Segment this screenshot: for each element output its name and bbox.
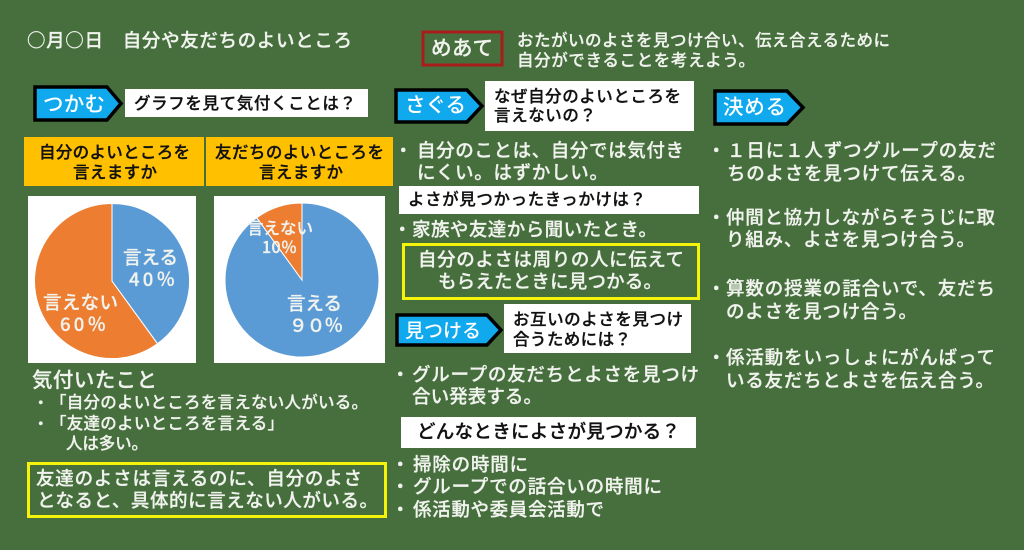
heading: 気付いたこと: 気付いたこと (32, 363, 157, 393)
finding text: 合い発表する。 (412, 383, 542, 409)
notes list: 「友達のよいところを言える」 (50, 410, 284, 434)
notes list: 人は多い。 (66, 430, 148, 454)
decision 4 (707, 344, 995, 393)
pie chart: self 40/60: 言える (123, 244, 178, 270)
decision 3 (707, 275, 995, 324)
goal text (517, 27, 890, 71)
question: グラフを見て気付くことは？: グラフを見て気付くことは？ (134, 90, 356, 114)
arrow label: 見つける (397, 315, 501, 345)
finding text: ・ (391, 361, 410, 387)
callout: summary: 友達のよさは言えるのに、自分のよさ (36, 465, 362, 491)
pie chart: self 40/60: 言えない (43, 289, 118, 315)
decision 1: ちのよさを見つけて伝える。 (727, 160, 976, 186)
arrow label: さぐる: さぐる (405, 88, 466, 118)
pie chart: friends 90/10: 10％ (262, 234, 297, 258)
chart heading: self: 言えますか (73, 159, 158, 183)
goal text: 自分ができることを考えよう。 (517, 47, 755, 71)
question: お互い (504, 304, 691, 353)
decision 3: ・ (707, 275, 726, 301)
chart heading: friends (206, 137, 393, 186)
callout: summary (28, 464, 386, 516)
chart heading: self (24, 137, 204, 186)
question: どんなとき: どんなときによさが見つかる？ (417, 418, 680, 444)
reasons text: 自分のことは、自分では気付き (417, 137, 684, 163)
decision 4: 係活動をいっしょにがんばって (726, 344, 995, 370)
panel: 見つける (391, 304, 699, 522)
question: なぜ: なぜ自分のよいところを (494, 83, 681, 107)
pie chart: friends 90/10 (214, 196, 385, 363)
pie chart: self 40/60 (28, 196, 196, 363)
notes list (33, 389, 368, 454)
answer: 家族や友達: ・ (393, 216, 412, 242)
arrow label: つかむ (35, 87, 121, 120)
pie chart: self 40/60: 60％ (60, 311, 106, 337)
answer: 家族や友達: 家族や友達から聞いたとき。 (412, 216, 657, 242)
decision 2 (707, 204, 995, 252)
panel: さぐる (393, 81, 699, 298)
notes list: 「自分のよいところを言えない人がいる。 (50, 389, 368, 413)
decision 1: １日に１人ずつグループの友だ (727, 137, 996, 163)
decision 2: 仲間と協力しながらそうじに取 (726, 204, 995, 230)
goal label: めあて: めあて (431, 31, 493, 61)
finding text: グループの友だちとよさを見つけ (412, 361, 699, 387)
chart heading: friends: 友だちのよいところを (215, 139, 384, 163)
arrow label: 決める: 決める (723, 90, 786, 120)
goal text: おたがいのよさを見つけ合い、伝え合えるために (517, 27, 890, 51)
panel: 決める (707, 90, 996, 393)
goal label: めあて (423, 31, 502, 65)
question: きっかけ: よさが見つかったきっかけは？ (408, 186, 646, 210)
chart heading: friends: 言えますか (259, 159, 344, 183)
decision 3: のよさを見つけ合う。 (726, 298, 917, 324)
list of occasions: 掃除の時間に (413, 451, 528, 477)
callout: 周りの人: 自分のよさは周りの人に伝えて (418, 246, 684, 272)
decision 1 (707, 137, 996, 186)
notes list: ・ (33, 391, 49, 413)
decision 4: いる友だちとよさを伝え合う。 (726, 367, 994, 393)
question: なぜ (485, 81, 694, 131)
decision 3: 算数の授業の話合いで、友だち (726, 275, 995, 301)
reasons text (394, 137, 684, 185)
decision 4: ・ (707, 344, 726, 370)
question: お互い: 合うためには？ (513, 326, 631, 350)
list of occasions: ・ (391, 451, 410, 477)
reasons text: ・ (394, 137, 413, 163)
arrow label: つかむ: つかむ (43, 87, 105, 117)
list of occasions: ・ (391, 496, 410, 522)
question: きっかけ (399, 186, 699, 214)
arrow label: 決める (715, 90, 803, 124)
panel: つかむ (24, 87, 393, 516)
list of occasions (391, 451, 662, 522)
notes list: ・ (33, 412, 49, 434)
callout: 周りの人: もらえたときに見つかる。 (438, 268, 662, 294)
decision 1: ・ (707, 137, 726, 163)
pie chart: friends 90/10: 言えない (247, 215, 313, 239)
title: ○月○日 自分や友だちのよいところ (27, 27, 352, 53)
list of occasions: ・ (391, 473, 410, 499)
question: なぜ: 言えないの？ (494, 102, 596, 126)
pie chart: friends 90/10: 言える (287, 290, 342, 316)
decision 2: り組み、よさを見つけ合う。 (726, 226, 975, 252)
reasons text: にくい。はずかしい。 (417, 159, 608, 185)
finding text (391, 361, 699, 409)
chart heading: self: 自分のよいところを (39, 139, 190, 163)
list of occasions: グループでの話合いの時間に (413, 473, 662, 499)
question: お互い: お互いのよさを見つけ (513, 306, 683, 330)
arrow label: 見つける: 見つける (405, 316, 481, 343)
callout: 周りの人 (404, 244, 698, 298)
list of occasions: 係活動や委員会活動で (413, 496, 604, 522)
callout: summary: となると、具体的に言えない人がいる。 (37, 487, 378, 513)
pie chart: self 40/60: 40％ (129, 266, 175, 292)
arrow label: さぐる (396, 88, 482, 122)
pie chart: friends 90/10: ９０％ (289, 312, 343, 338)
decision 2: ・ (707, 204, 726, 230)
